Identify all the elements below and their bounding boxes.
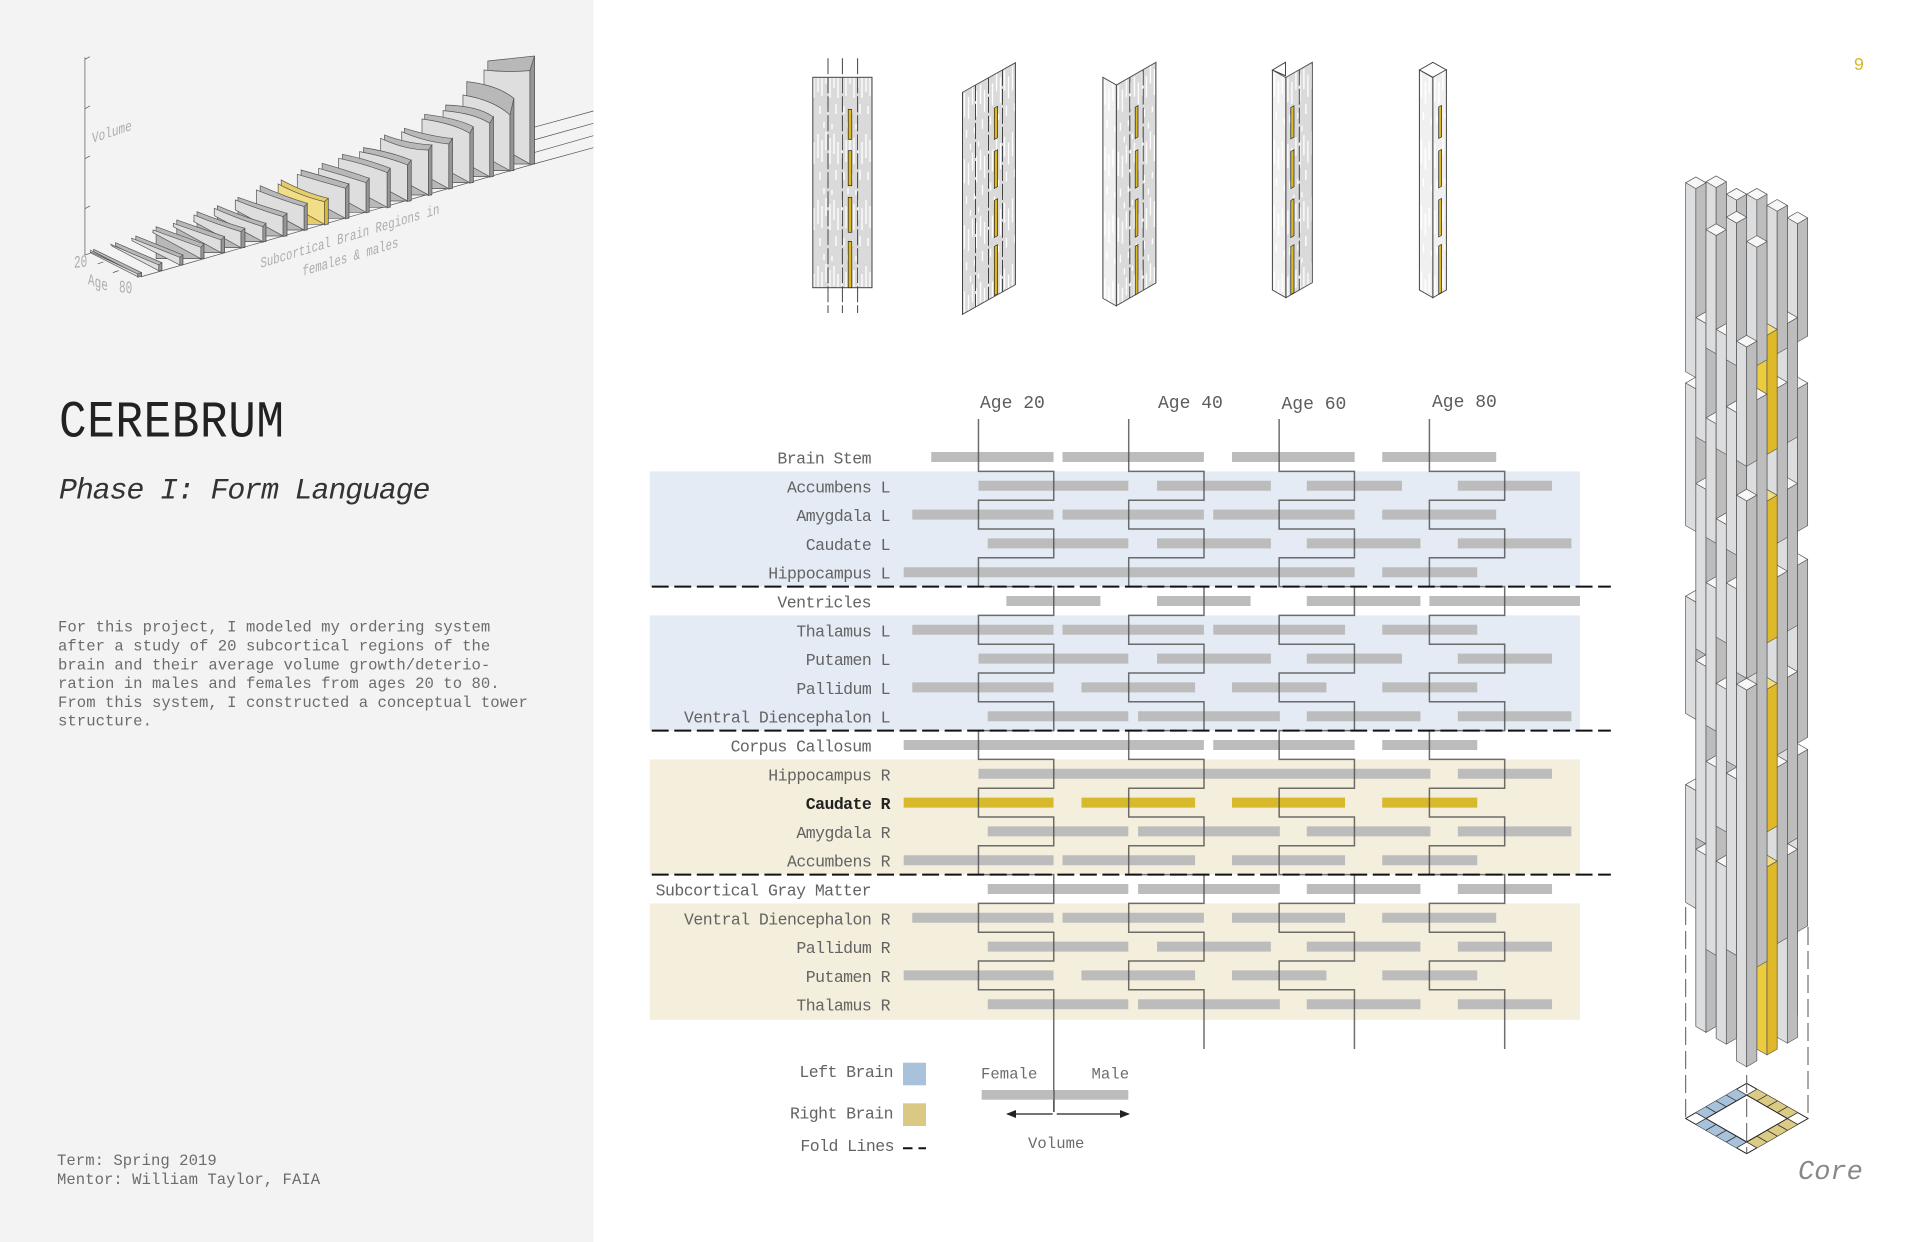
legend: brain side and fold lines: Right Brain [790, 1104, 893, 1123]
row labels: brain regions: Corpus Callosum [731, 738, 872, 756]
fins in zoom-space coordinates [85, 56, 593, 277]
row labels: brain regions: Caudate R [806, 795, 891, 814]
row labels: brain regions: Ventricles [777, 594, 871, 612]
text block: project description: ration in males and females from ages 20 to 80. [58, 675, 500, 693]
tower: gold Caudate R column [1757, 324, 1777, 1055]
text block: project description: structure. [58, 713, 152, 731]
legend: female and male volume key: Female [981, 1065, 1037, 1083]
serpentine fold lines [978, 419, 1505, 1112]
legend: female and male volume key: Male [1092, 1065, 1129, 1083]
panel: left sidebar background [0, 0, 594, 1242]
bands: left and right brain backgrounds [650, 471, 1580, 1020]
fold stage 3: first fold [1103, 62, 1156, 306]
page number: 9 [1854, 56, 1864, 76]
chart label: age axis: 80 [119, 279, 132, 300]
row labels: brain regions [656, 450, 891, 1016]
age headers: Age 20 [980, 394, 1045, 414]
row labels: brain regions: Putamen R [806, 968, 891, 987]
fold stage 4: second fold [1272, 62, 1312, 298]
chart label: age axis: 20 [74, 253, 87, 274]
row labels: brain regions: Ventral Diencephalon R [684, 910, 891, 929]
row labels: brain regions: Hippocampus R [768, 766, 891, 785]
legend: female and male volume key: Volume [1028, 1135, 1084, 1153]
row labels: brain regions: Thalamus L [796, 622, 890, 641]
text block: term and mentor: Term: Spring 2019 [57, 1152, 217, 1170]
tower: core of 20 columns [1686, 176, 1808, 1118]
row labels: brain regions: Thalamus R [796, 997, 891, 1016]
age headers: Age 40 [1158, 394, 1223, 414]
row labels: brain regions: Caudate L [806, 536, 890, 555]
legend: brain side and fold lines: Fold Lines [800, 1137, 894, 1156]
legend: female and male volume key [981, 1065, 1130, 1153]
chart label: age axis: Age [88, 271, 108, 297]
dashed section dividers [652, 587, 1611, 875]
arrow: male direction [1057, 1110, 1130, 1118]
text block: project description: For this project, I modeled my ordering system [58, 619, 490, 637]
chart label: volume axis: Volume [92, 119, 132, 149]
text block: project description: From this system, I constructed a conceptual tower [58, 694, 528, 712]
chart: 3D subcortical volume fins [74, 56, 593, 300]
chart label: age axis [74, 253, 132, 300]
row labels: brain regions: Hippocampus L [768, 565, 890, 584]
row labels: brain regions: Amygdala R [796, 824, 891, 843]
text block: term and mentor: Mentor: William Taylor, FAIA [57, 1171, 321, 1189]
row labels: brain regions: Pallidum L [796, 680, 890, 699]
row labels: brain regions: Ventral Diencephalon L [684, 709, 890, 728]
row labels: brain regions: Pallidum R [796, 939, 891, 958]
chart label: subcortical regions: females & males [302, 234, 398, 281]
text block: project description: brain and their average volume growth/deterio- [58, 656, 490, 674]
label: core: Core [1798, 1158, 1863, 1188]
age headers [980, 393, 1497, 415]
row labels: brain regions: Putamen L [806, 651, 890, 670]
fold stage 5: closed tube [1419, 62, 1446, 298]
folding sequence diagrams [813, 58, 1446, 314]
guide lines to the plan [1686, 907, 1808, 1118]
row labels: brain regions: Amygdala L [796, 507, 890, 526]
chart: age bars per brain region [904, 457, 1580, 1004]
title: CEREBRUM [59, 393, 285, 453]
row labels: brain regions: Accumbens R [787, 853, 891, 872]
core plan: isometric ring [1686, 1075, 1808, 1154]
text block: project description: after a study of 20 subcortical regions of the [58, 638, 490, 656]
age headers: Age 80 [1432, 393, 1497, 413]
legend: brain side and fold lines: Left Brain [799, 1063, 893, 1082]
fold stage 2: skewed sheet [962, 63, 1015, 314]
chart label: subcortical regions: Subcortical Brain Regions in [260, 201, 439, 273]
row labels: brain regions: Subcortical Gray Matter [656, 882, 871, 900]
age headers: Age 60 [1282, 395, 1346, 415]
subtitle: Phase I: Form Language [59, 474, 429, 508]
arrow: female direction [1006, 1110, 1053, 1118]
legend: brain side and fold lines [790, 1063, 926, 1156]
row labels: brain regions: Accumbens L [787, 478, 890, 497]
row labels: brain regions: Brain Stem [777, 450, 872, 468]
fold stage 1: flat sheet [813, 58, 872, 313]
